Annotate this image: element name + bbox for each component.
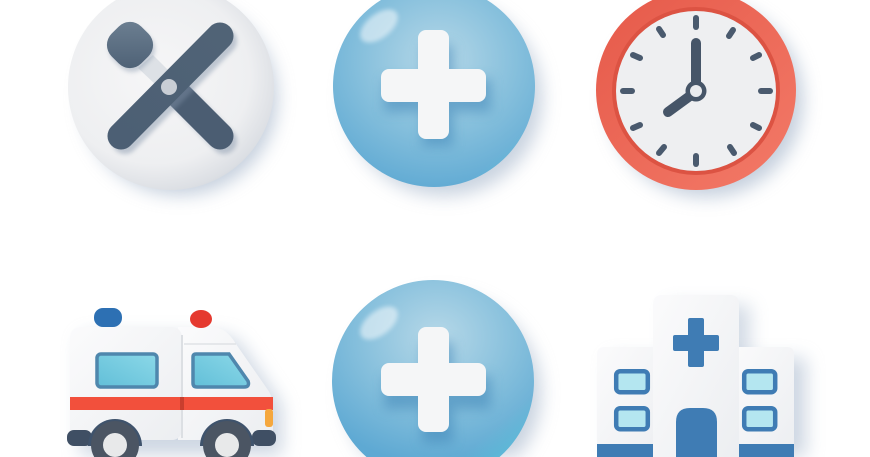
cab window: [193, 354, 248, 387]
light: blue siren: [94, 308, 122, 327]
light: red siren: [190, 310, 212, 328]
icon: wall clock: [596, 0, 803, 197]
right wing: [725, 347, 794, 457]
door: [676, 408, 717, 457]
icon: blue plus button (top): [333, 0, 542, 196]
main tower: [653, 295, 739, 457]
windows: [616, 371, 775, 429]
rear window: [97, 354, 157, 387]
icon: cross-shaped tool button: [68, 0, 277, 195]
icon: hospital building: [597, 295, 806, 457]
icon: blue plus button (bottom): [332, 280, 541, 457]
icon: ambulance: [67, 308, 282, 457]
red stripe: [70, 397, 273, 410]
left wing: [597, 347, 667, 457]
clock tick marks: [623, 18, 770, 164]
hospital cross: [673, 318, 719, 367]
clock hands: [668, 43, 696, 112]
